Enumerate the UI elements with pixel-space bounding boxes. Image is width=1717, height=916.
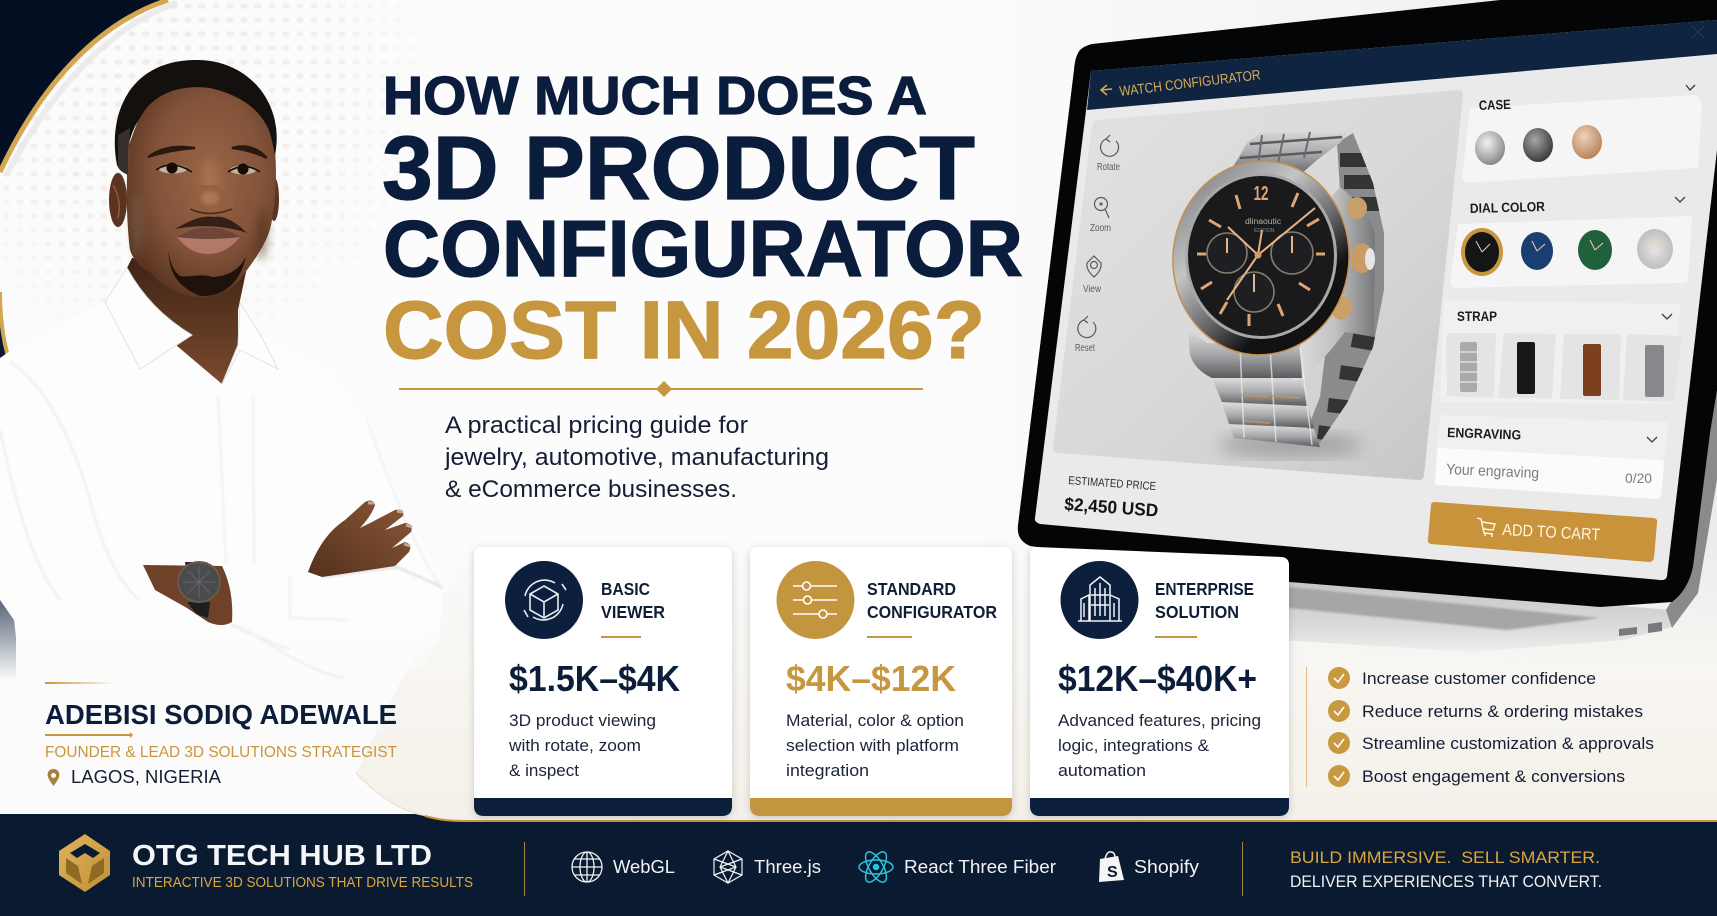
viewer panel [1053, 90, 1463, 480]
subtitle [444, 412, 829, 503]
watch: EDITION [1254, 228, 1275, 234]
tool: view: View [1083, 284, 1102, 295]
navy corner and gold arc [0, 0, 177, 680]
panel: dial color: DIAL COLOR [1470, 199, 1545, 216]
panel: case [1462, 85, 1702, 183]
subdials [1207, 232, 1313, 312]
eyes [156, 162, 260, 174]
location: LAGOS, NIGERIA [71, 767, 221, 787]
ear right [269, 177, 279, 221]
tool: view [1083, 256, 1102, 295]
benefit 1: Increase customer confidence [1362, 670, 1596, 688]
watch [1163, 130, 1390, 458]
benefit 4 [1328, 765, 1625, 787]
card: standard configurator: integration [786, 761, 869, 780]
footer brand [59, 834, 473, 892]
forearm hand over [308, 501, 412, 577]
footer brand: INTERACTIVE 3D SOLUTIONS THAT DRIVE RESULTS [132, 875, 473, 891]
panel: engraving: Your engraving [1446, 461, 1539, 482]
benefit 3 [1328, 732, 1654, 754]
card: enterprise solution: $12K–$40K+ [1058, 658, 1257, 699]
watch hands [1227, 208, 1315, 300]
icon: shopify bag: S [1107, 864, 1118, 881]
upper bracelet [1233, 130, 1350, 178]
card: enterprise solution: SOLUTION [1155, 602, 1239, 622]
card: enterprise solution: logic, integrations & [1058, 736, 1210, 755]
icon: sliders [776, 561, 854, 639]
card: standard configurator: STANDARD [867, 579, 956, 599]
title: COST IN 2026? [383, 285, 985, 376]
watch dial [1188, 176, 1334, 336]
benefit 2: Reduce returns & ordering mistakes [1362, 703, 1643, 721]
panel: strap: STRAP [1457, 309, 1497, 324]
card: enterprise solution: Advanced features, pricing [1058, 711, 1261, 730]
tech stack: Three.js [754, 856, 821, 877]
cream lower band [356, 540, 1717, 821]
card: standard configurator: selection with platform [786, 736, 959, 755]
configurator header bar: WATCH CONFIGURATOR [1118, 66, 1261, 99]
laptop silver rim [1666, 390, 1717, 628]
presenter caption [45, 682, 397, 787]
tech stack: WebGL [613, 856, 675, 877]
benefit 2 [1328, 700, 1643, 722]
icon: office buildings [1060, 561, 1138, 639]
configurator header bar [1087, 20, 1717, 110]
icon: OTG logo [59, 834, 110, 892]
icon: rotating cube [505, 561, 583, 639]
title divider with diamond [399, 381, 923, 397]
moustache and beard [168, 216, 247, 296]
tool: zoom: Zoom [1090, 223, 1111, 234]
card: enterprise solution [1030, 547, 1289, 816]
card: standard configurator [750, 547, 1012, 816]
panel: engraving: ENGRAVING [1447, 425, 1521, 443]
laptop [1018, 0, 1717, 652]
ear left [109, 173, 127, 227]
panel: strap [1440, 300, 1682, 404]
tool: rotate [1097, 135, 1120, 173]
tool: zoom [1090, 198, 1111, 234]
tech stack: React Three Fiber [904, 856, 1056, 877]
tech stack: Shopify [1134, 856, 1200, 877]
title [382, 66, 1023, 376]
head [127, 87, 276, 297]
neck [127, 258, 246, 384]
title: HOW MUCH DOES A [383, 66, 927, 126]
back bracelet [1308, 133, 1384, 444]
laptop screen [1035, 20, 1717, 580]
footer brand: OTG TECH HUB LTD [132, 840, 432, 872]
benefits list [1306, 667, 1654, 787]
case side [1240, 187, 1375, 385]
name: ADEBISI SODIQ ADEWALE [45, 699, 397, 730]
panel: engraving: 0/20 [1625, 471, 1652, 486]
forearm under [143, 565, 232, 625]
benefit 3: Streamline customization & approvals [1362, 735, 1654, 753]
benefit 1 [1328, 667, 1596, 689]
footer divider [524, 842, 525, 896]
lips [177, 228, 240, 254]
laptop base [1280, 578, 1672, 652]
person portrait [0, 60, 442, 690]
shirt collar [105, 268, 278, 384]
footer band [0, 773, 1717, 916]
card: basic viewer [474, 547, 732, 816]
role: FOUNDER & LEAD 3D SOLUTIONS STRATEGIST [45, 744, 397, 761]
gold rule [45, 732, 133, 738]
estimated price: ESTIMATED PRICE [1068, 475, 1157, 493]
card: basic viewer: $1.5K–$4K [509, 658, 680, 699]
watch: dlinaoutic [1245, 217, 1281, 226]
panel: case: CASE [1479, 97, 1511, 113]
estimated price [1064, 475, 1159, 521]
estimated price: $2,450 USD [1064, 494, 1159, 521]
card: enterprise solution: automation [1058, 761, 1146, 780]
eyebrows [148, 146, 267, 158]
nose [186, 185, 235, 214]
footer tagline: DELIVER EXPERIENCES THAT CONVERT. [1290, 872, 1602, 891]
watch: 12 [1254, 183, 1268, 205]
subtitle: jewelry, automotive, manufacturing [444, 444, 829, 471]
card: basic viewer: BASIC [601, 579, 650, 599]
icon: location pin [48, 769, 59, 786]
shirt body [0, 269, 442, 690]
viewer tools [1075, 135, 1120, 354]
watch shadow [1218, 432, 1362, 458]
footer tagline: BUILD IMMERSIVE. SELL SMARTER. [1290, 848, 1600, 867]
card: standard configurator: CONFIGURATOR [867, 602, 997, 622]
tool: rotate: Rotate [1097, 162, 1120, 173]
wristwatch [178, 562, 220, 618]
tool: reset [1075, 316, 1096, 354]
hair [115, 60, 277, 175]
card: enterprise solution: ENTERPRISE [1155, 579, 1254, 599]
card: basic viewer: & inspect [509, 761, 579, 780]
card: standard configurator: $4K–$12K [786, 658, 956, 699]
shirt shading [0, 362, 442, 678]
title: 3D PRODUCT [382, 119, 975, 219]
icon: shopify bag [1099, 852, 1124, 882]
panel: engraving [1435, 415, 1668, 499]
watch case [1163, 152, 1359, 364]
card: standard configurator: Material, color & option [786, 711, 964, 730]
add to cart button: ADD TO CART [1502, 521, 1601, 544]
card: basic viewer: VIEWER [601, 602, 665, 622]
subtitle: & eCommerce businesses. [445, 476, 737, 503]
icon: three.js hexagon [714, 851, 742, 883]
card: basic viewer: with rotate, zoom [508, 736, 641, 755]
add to cart button [1428, 502, 1657, 562]
lower bracelet [1188, 330, 1320, 447]
icon: react atom [859, 849, 893, 885]
laptop bezel [1018, 0, 1717, 607]
icon: globe [572, 852, 602, 882]
subtitle: A practical pricing guide for [445, 412, 748, 439]
title: CONFIGURATOR [383, 204, 1023, 293]
benefit 4: Boost engagement & conversions [1362, 768, 1625, 786]
tech stack [572, 849, 1200, 885]
footer divider [1242, 842, 1243, 896]
tool: reset: Reset [1075, 343, 1095, 354]
crown and pushers [1328, 197, 1375, 323]
halftone dots [2, 3, 374, 288]
footer tagline [1290, 848, 1602, 891]
face shading [131, 159, 268, 260]
panel: dial color [1450, 197, 1692, 288]
card: basic viewer: 3D product viewing [509, 711, 656, 730]
